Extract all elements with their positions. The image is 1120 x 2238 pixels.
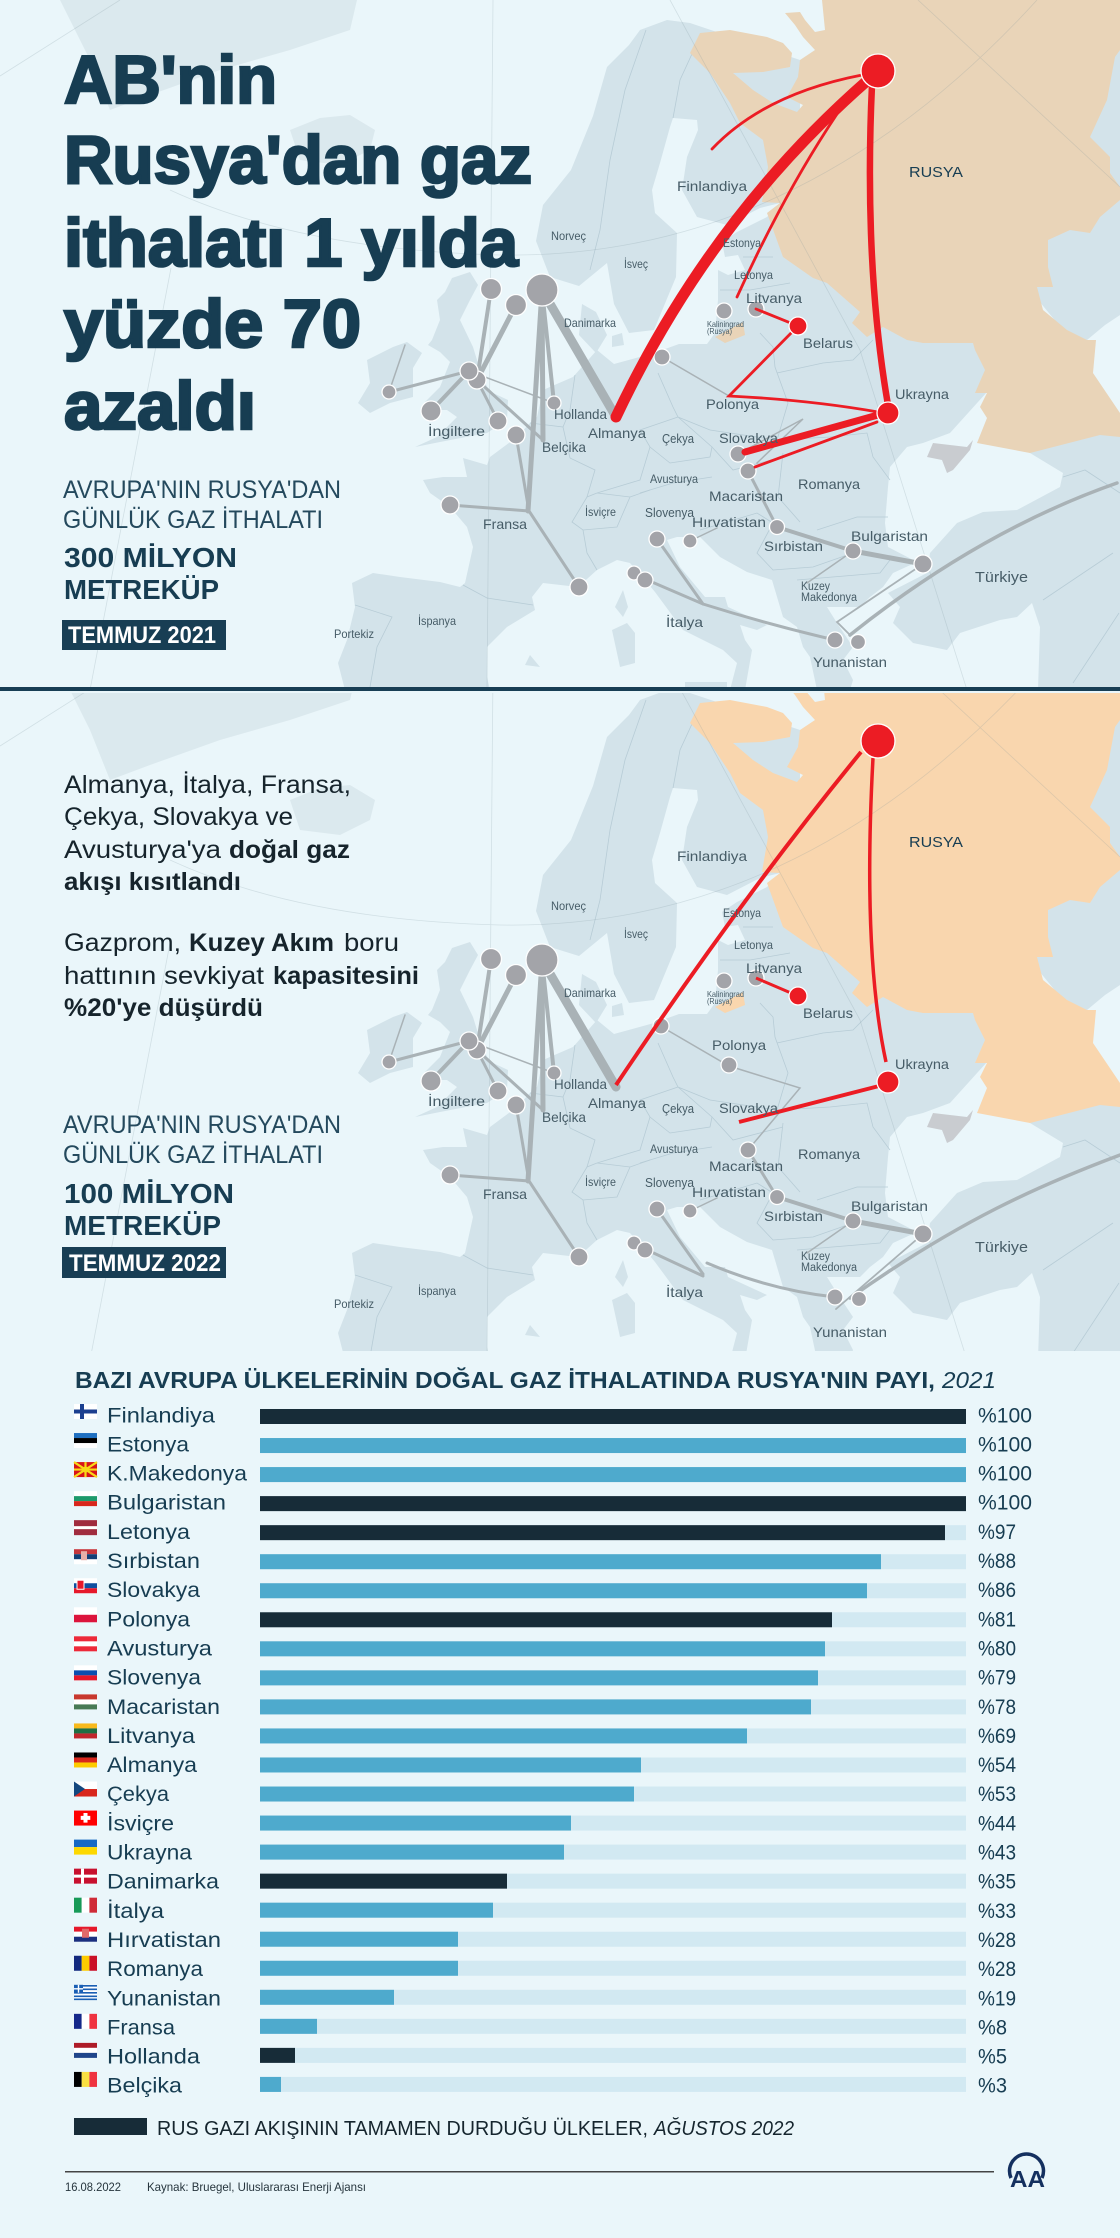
row: Polonya: Polonya xyxy=(107,1608,190,1631)
country labels 2021: Makedonya xyxy=(801,592,858,604)
grey pipelines 2022 xyxy=(389,959,1120,1309)
row: Çekya: %53 xyxy=(978,1783,1016,1806)
red gas flows 2021 xyxy=(616,75,888,467)
row: Yunanistan: %19 xyxy=(978,1987,1016,2010)
country labels 2022: İtalya xyxy=(666,1283,703,1300)
row: Finlandiya xyxy=(74,1404,1032,1427)
row: Sırbistan: Sırbistan xyxy=(107,1550,200,1573)
text block: restricted countries: doğal gaz xyxy=(229,836,350,864)
title: azaldı xyxy=(64,368,256,444)
country labels 2022: Çekya xyxy=(662,1101,695,1116)
row: Hırvatistan xyxy=(74,1927,1016,1952)
row: Polonya xyxy=(74,1607,1016,1631)
row: Letonya: Letonya xyxy=(107,1521,190,1544)
country labels 2021: İtalya xyxy=(666,613,703,630)
row: Slovenya: Slovenya xyxy=(107,1667,201,1690)
row: Danimarka xyxy=(74,1869,1016,1894)
row: Bulgaristan xyxy=(74,1491,1032,1515)
row: İsviçre xyxy=(74,1811,1016,1835)
grey nodes 2021 xyxy=(382,274,932,650)
text block: Gazprom: kapasitesini xyxy=(273,962,419,990)
date badge 2021: TEMMUZ 2021 xyxy=(68,622,216,649)
red nodes 2021 xyxy=(789,54,899,424)
row: Slovakya: %86 xyxy=(978,1579,1016,1602)
row: Polonya: %81 xyxy=(978,1608,1016,1631)
country labels 2021: Danimarka xyxy=(564,316,616,330)
row: Ukrayna: %43 xyxy=(978,1842,1016,1865)
map panel: July 2021 xyxy=(0,0,1120,690)
title xyxy=(64,42,532,444)
volume 2022 xyxy=(64,1178,234,1241)
country labels 2021: Kuzey xyxy=(801,581,830,593)
row: İtalya: %33 xyxy=(978,1900,1016,1923)
country labels 2021: İsviçre xyxy=(585,505,616,519)
row: Estonya: Estonya xyxy=(107,1433,189,1456)
country labels 2022: İngiltere xyxy=(428,1092,485,1109)
bar chart xyxy=(74,1404,1032,2098)
grey pipelines 2021 xyxy=(389,289,1117,640)
country labels 2022: Fransa xyxy=(483,1186,527,1202)
Kaliningrad xyxy=(715,322,745,343)
row: Slovenya: %79 xyxy=(978,1667,1016,1690)
country labels 2022: Norveç xyxy=(551,899,586,913)
row: Yunanistan xyxy=(74,1985,1016,2010)
row: Fransa: Fransa xyxy=(107,2016,175,2039)
row: Yunanistan: Yunanistan xyxy=(107,1987,221,2010)
country labels 2022: Litvanya xyxy=(746,960,802,976)
country labels 2022: Belarus xyxy=(803,1005,853,1021)
country labels 2021: Almanya xyxy=(588,425,646,441)
country labels 2021: Yunanistan xyxy=(813,654,887,670)
row: K.Makedonya: %100 xyxy=(978,1463,1032,1486)
grey nodes 2022 xyxy=(382,944,932,1306)
country labels 2021: İspanya xyxy=(418,614,456,628)
row: İsviçre: İsviçre xyxy=(107,1812,174,1835)
country labels 2021 xyxy=(334,164,1028,670)
country labels 2022: Yunanistan xyxy=(813,1324,887,1340)
red gas flows 2022 xyxy=(616,752,886,1122)
footer text: source: Kaynak: Bruegel, Uluslararası Enerji Ajansı xyxy=(147,2180,366,2194)
row: Almanya xyxy=(74,1752,1016,1777)
row: Hollanda: %5 xyxy=(978,2046,1007,2069)
country labels 2022: Slovenya xyxy=(645,1176,694,1190)
text block: restricted countries: Çekya, Slovakya ve xyxy=(64,803,293,831)
row: Letonya: %97 xyxy=(978,1521,1016,1544)
subtitle 2021: AVRUPA'NIN RUSYA'DAN xyxy=(63,476,341,504)
country labels 2021: Letonya xyxy=(734,268,773,282)
icon: AA logo: AA xyxy=(1010,2166,1045,2192)
row: Macaristan: Macaristan xyxy=(107,1696,220,1719)
country labels 2021: Avusturya xyxy=(650,472,698,486)
icon: AA logo xyxy=(1010,2154,1045,2192)
country labels 2021: Hırvatistan xyxy=(692,514,766,530)
country labels 2022: Ukrayna xyxy=(895,1056,949,1072)
footer text: date: 16.08.2022 xyxy=(65,2180,121,2194)
country labels 2022: Danimarka xyxy=(564,986,616,1000)
country labels 2022: Almanya xyxy=(588,1095,646,1111)
row: Sırbistan: %88 xyxy=(978,1550,1016,1573)
text block: restricted countries: akışı kısıtlandı xyxy=(64,868,241,896)
title: yüzde 70 xyxy=(64,286,361,362)
row: Romanya: Romanya xyxy=(107,1958,203,1981)
country labels 2022: Sırbistan xyxy=(764,1208,823,1224)
country labels 2021: Polonya xyxy=(706,396,759,412)
text block: restricted countries xyxy=(64,770,351,896)
volume 2021: 300 MİLYON xyxy=(64,542,237,573)
subtitle 2022: GÜNLÜK GAZ İTHALATI xyxy=(63,1140,323,1169)
country labels 2021: Estonya xyxy=(723,236,761,250)
country labels 2021: Hollanda xyxy=(554,406,607,422)
row: Avusturya xyxy=(74,1636,1016,1661)
row: Litvanya: %69 xyxy=(978,1725,1016,1748)
country labels 2021: Çekya xyxy=(662,431,695,446)
red nodes 2022 xyxy=(789,724,899,1093)
country labels 2021: (Rusya) xyxy=(707,326,732,336)
row: Romanya: %28 xyxy=(978,1958,1016,1981)
volume 2022: METREKÜP xyxy=(64,1210,221,1241)
row: Macaristan: %78 xyxy=(978,1696,1016,1719)
row: Belçika: Belçika xyxy=(107,2075,182,2098)
row: Letonya xyxy=(74,1520,1016,1544)
country labels 2021: İngiltere xyxy=(428,422,485,439)
country labels 2022: İsveç xyxy=(624,927,648,941)
country labels 2021: Belarus xyxy=(803,335,853,351)
country labels 2022: Makedonya xyxy=(801,1262,858,1274)
country labels 2021: RUSYA xyxy=(909,164,963,181)
country labels 2022: (Rusya) xyxy=(707,996,732,1006)
Kaliningrad xyxy=(715,992,745,1013)
country labels 2021: Romanya xyxy=(798,476,860,492)
date badge 2022: TEMMUZ 2022 xyxy=(69,1250,221,1277)
country labels 2022: Macaristan xyxy=(709,1158,783,1174)
divider xyxy=(0,687,1120,691)
country labels 2022: Slovakya xyxy=(719,1100,778,1116)
row: Macaristan xyxy=(74,1694,1016,1719)
country labels 2022: Romanya xyxy=(798,1146,860,1162)
row: İtalya xyxy=(74,1898,1016,1923)
country labels 2022: Hollanda xyxy=(554,1076,607,1092)
country labels 2022: Portekiz xyxy=(334,1297,374,1311)
row: Ukrayna xyxy=(74,1840,1016,1865)
row: İtalya: İtalya xyxy=(107,1900,164,1923)
country labels 2022: Avusturya xyxy=(650,1142,698,1156)
country labels 2022: İsviçre xyxy=(585,1175,616,1189)
row: Estonya xyxy=(74,1433,1032,1456)
row: Finlandiya: Finlandiya xyxy=(107,1404,215,1427)
row: Hollanda xyxy=(74,2043,1007,2069)
country labels 2021: Norveç xyxy=(551,229,586,243)
subtitle 2021: GÜNLÜK GAZ İTHALATI xyxy=(63,505,323,534)
country labels 2022: Türkiye xyxy=(975,1239,1028,1256)
row: Hırvatistan: %28 xyxy=(978,1929,1016,1952)
country labels 2022: Hırvatistan xyxy=(692,1184,766,1200)
row: Romanya xyxy=(74,1956,1016,1981)
volume 2022: 100 MİLYON xyxy=(64,1178,234,1209)
country labels 2021: Litvanya xyxy=(746,290,802,306)
chart heading: 2021 xyxy=(941,1367,996,1393)
country labels 2022: Belçika xyxy=(542,1109,586,1125)
row: Fransa xyxy=(74,2014,1007,2039)
row: Almanya: %54 xyxy=(978,1754,1016,1777)
country labels 2021: Sırbistan xyxy=(764,538,823,554)
row: Bulgaristan: Bulgaristan xyxy=(107,1492,226,1515)
map panel: July 2022 xyxy=(0,670,1120,1360)
row: Slovakya xyxy=(74,1578,1016,1602)
text block: Gazprom: Gazprom, xyxy=(64,929,181,957)
footer rule xyxy=(65,2171,994,2172)
text block: restricted countries: Avusturya'ya xyxy=(64,836,221,864)
volume 2021 xyxy=(64,542,237,605)
row: Finlandiya: %100 xyxy=(978,1404,1032,1427)
chart heading: BAZI AVRUPA ÜLKELERİNİN DOĞAL GAZ İTHALATINDA RUSYA'NIN PAYI, xyxy=(75,1366,935,1393)
row: Slovenya xyxy=(74,1665,1016,1690)
row: Sırbistan xyxy=(74,1549,1016,1573)
country labels 2021: Slovenya xyxy=(645,506,694,520)
row: Estonya: %100 xyxy=(978,1433,1032,1456)
country labels 2021: İsveç xyxy=(624,257,648,271)
row: Belçika xyxy=(74,2072,1007,2098)
country labels 2021: Macaristan xyxy=(709,488,783,504)
country labels 2021: Fransa xyxy=(483,516,527,532)
country labels 2021: Portekiz xyxy=(334,627,374,641)
row: Fransa: %8 xyxy=(978,2016,1007,2039)
title: ithalatı 1 yılda xyxy=(64,205,519,281)
country labels 2022 xyxy=(334,834,1028,1340)
row: Ukrayna: Ukrayna xyxy=(107,1842,192,1865)
row: Slovakya: Slovakya xyxy=(107,1579,200,1602)
country labels 2022: Finlandiya xyxy=(677,848,747,864)
row: Almanya: Almanya xyxy=(107,1754,197,1777)
country labels 2022: Letonya xyxy=(734,938,773,952)
subtitle 2021 xyxy=(63,476,341,534)
text block: Gazprom: hattının sevkiyat xyxy=(64,962,264,990)
country labels 2022: Kuzey xyxy=(801,1251,830,1263)
legend xyxy=(74,2117,794,2140)
text block: restricted countries: Almanya, İtalya, Fransa, xyxy=(64,770,351,799)
country labels 2022: İspanya xyxy=(418,1284,456,1298)
subtitle 2022 xyxy=(63,1111,341,1169)
country labels 2022: Estonya xyxy=(723,906,761,920)
country labels 2022: RUSYA xyxy=(909,834,963,851)
country labels 2022: Bulgaristan xyxy=(851,1198,928,1214)
row: Litvanya: Litvanya xyxy=(107,1725,195,1748)
country labels 2021: Kaliningrad xyxy=(707,319,744,329)
country labels 2021: Türkiye xyxy=(975,569,1028,586)
text block: Gazprom: %20'ye düşürdü xyxy=(64,994,263,1022)
country labels 2021: Bulgaristan xyxy=(851,528,928,544)
country labels 2021: Finlandiya xyxy=(677,178,747,194)
legend: RUS GAZI AKIŞININ TAMAMEN DURDUĞU ÜLKELER, xyxy=(157,2117,648,2140)
text block: Gazprom: Kuzey Akım xyxy=(189,929,334,957)
row: Belçika: %3 xyxy=(978,2075,1007,2098)
row: İsviçre: %44 xyxy=(978,1812,1016,1835)
row: Çekya: Çekya xyxy=(107,1783,169,1806)
country labels 2021: Ukrayna xyxy=(895,386,949,402)
row: Hollanda: Hollanda xyxy=(107,2046,200,2069)
country labels 2021: Slovakya xyxy=(719,430,778,446)
country labels 2022: Kaliningrad xyxy=(707,989,744,999)
title: AB'nin xyxy=(64,42,277,118)
row: Çekya xyxy=(74,1782,1016,1806)
legend: AĞUSTOS 2022 xyxy=(653,2117,794,2140)
row: Bulgaristan: %100 xyxy=(978,1492,1032,1515)
row: Danimarka: Danimarka xyxy=(107,1871,219,1894)
row: K.Makedonya: K.Makedonya xyxy=(107,1463,247,1486)
country labels 2022: Polonya xyxy=(712,1037,766,1053)
text block: Gazprom xyxy=(64,929,419,1022)
row: Hırvatistan: Hırvatistan xyxy=(107,1929,221,1952)
volume 2021: METREKÜP xyxy=(64,574,219,605)
row: K.Makedonya xyxy=(74,1462,1032,1486)
title: Rusya'dan gaz xyxy=(64,122,532,198)
row: Danimarka: %35 xyxy=(978,1871,1016,1894)
text block: Gazprom: boru xyxy=(344,929,399,957)
row: Litvanya xyxy=(74,1723,1016,1748)
row: Avusturya: Avusturya xyxy=(107,1638,212,1661)
country labels 2021: Belçika xyxy=(542,439,586,455)
subtitle 2022: AVRUPA'NIN RUSYA'DAN xyxy=(63,1111,341,1139)
row: Avusturya: %80 xyxy=(978,1638,1016,1661)
